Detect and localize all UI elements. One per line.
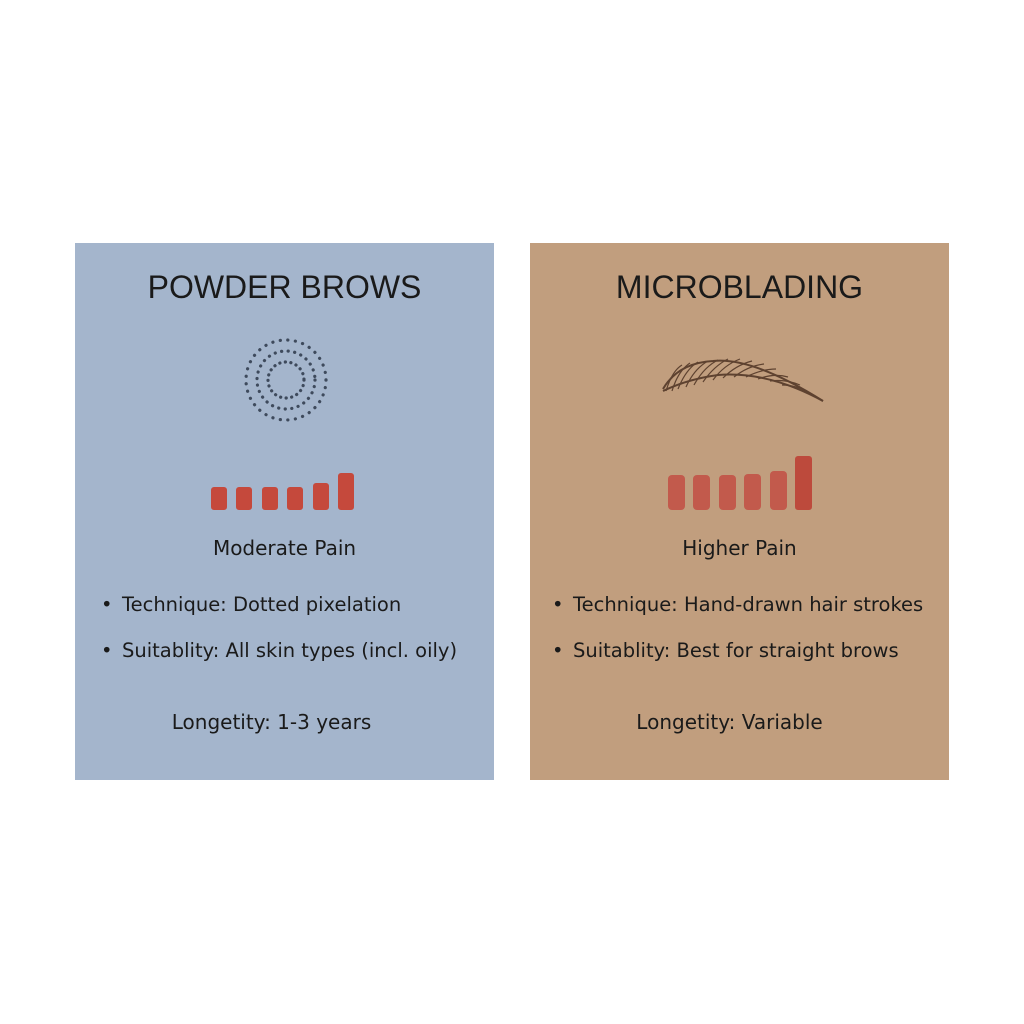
bullet: suitability: Suitablity: All skin types (incl. oily)	[122, 639, 457, 662]
pain bar chart	[668, 456, 812, 510]
heading: MICROBLADING	[616, 269, 863, 305]
bullet: suitability: Suitablity: Best for straight brows	[573, 639, 899, 662]
panel: powder brows	[75, 243, 494, 780]
bullet: technique: Technique: Dotted pixelation	[122, 593, 401, 616]
pain bar chart	[211, 473, 354, 510]
panel: microblading	[530, 243, 949, 780]
heading: POWDER BROWS	[148, 269, 421, 305]
longevity: Longetity: Variable	[636, 710, 823, 734]
pain label: Higher Pain	[682, 536, 797, 560]
icon: dotted circle	[244, 338, 328, 422]
icon: eyebrow	[662, 358, 824, 402]
bullet: technique: Technique: Hand-drawn hair strokes	[573, 593, 923, 616]
pain label: Moderate Pain	[213, 536, 356, 560]
longevity: Longetity: 1-3 years	[172, 710, 371, 734]
